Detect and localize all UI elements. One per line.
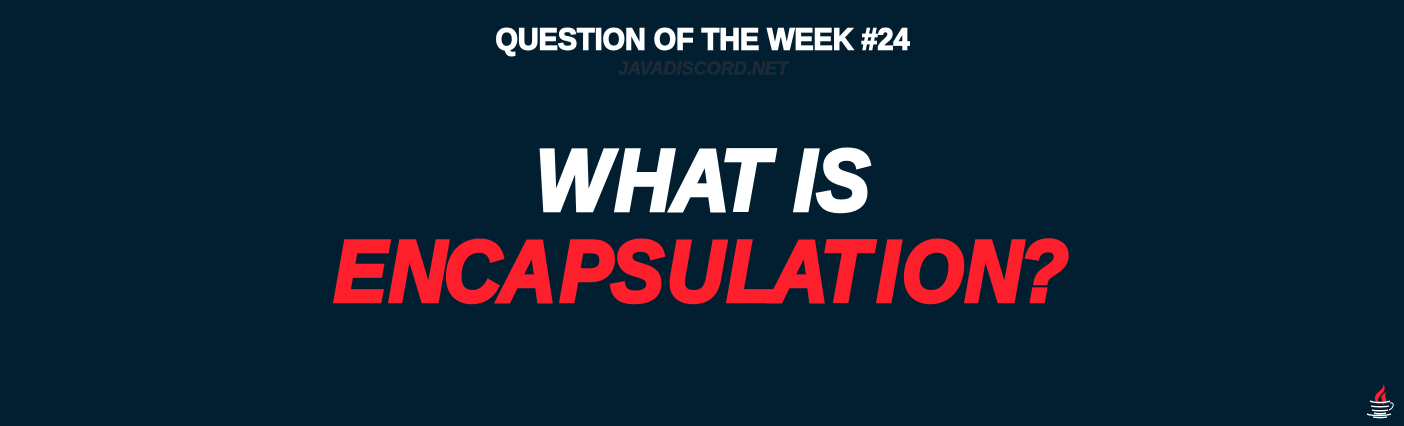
- heading: question of the week: QUESTION OF THE WEEK #24: [496, 22, 910, 56]
- cup: [1370, 401, 1390, 414]
- saucer: [1367, 414, 1391, 418]
- title line 2: ENCAPSULATION?: [334, 223, 1068, 320]
- handle: [1389, 403, 1393, 410]
- subheading: website: JAVADISCORD.NET: [618, 59, 790, 79]
- icon: java coffee cup logo: [1367, 384, 1393, 418]
- title line 1: WHAT IS: [536, 132, 870, 229]
- flame: [1375, 384, 1386, 405]
